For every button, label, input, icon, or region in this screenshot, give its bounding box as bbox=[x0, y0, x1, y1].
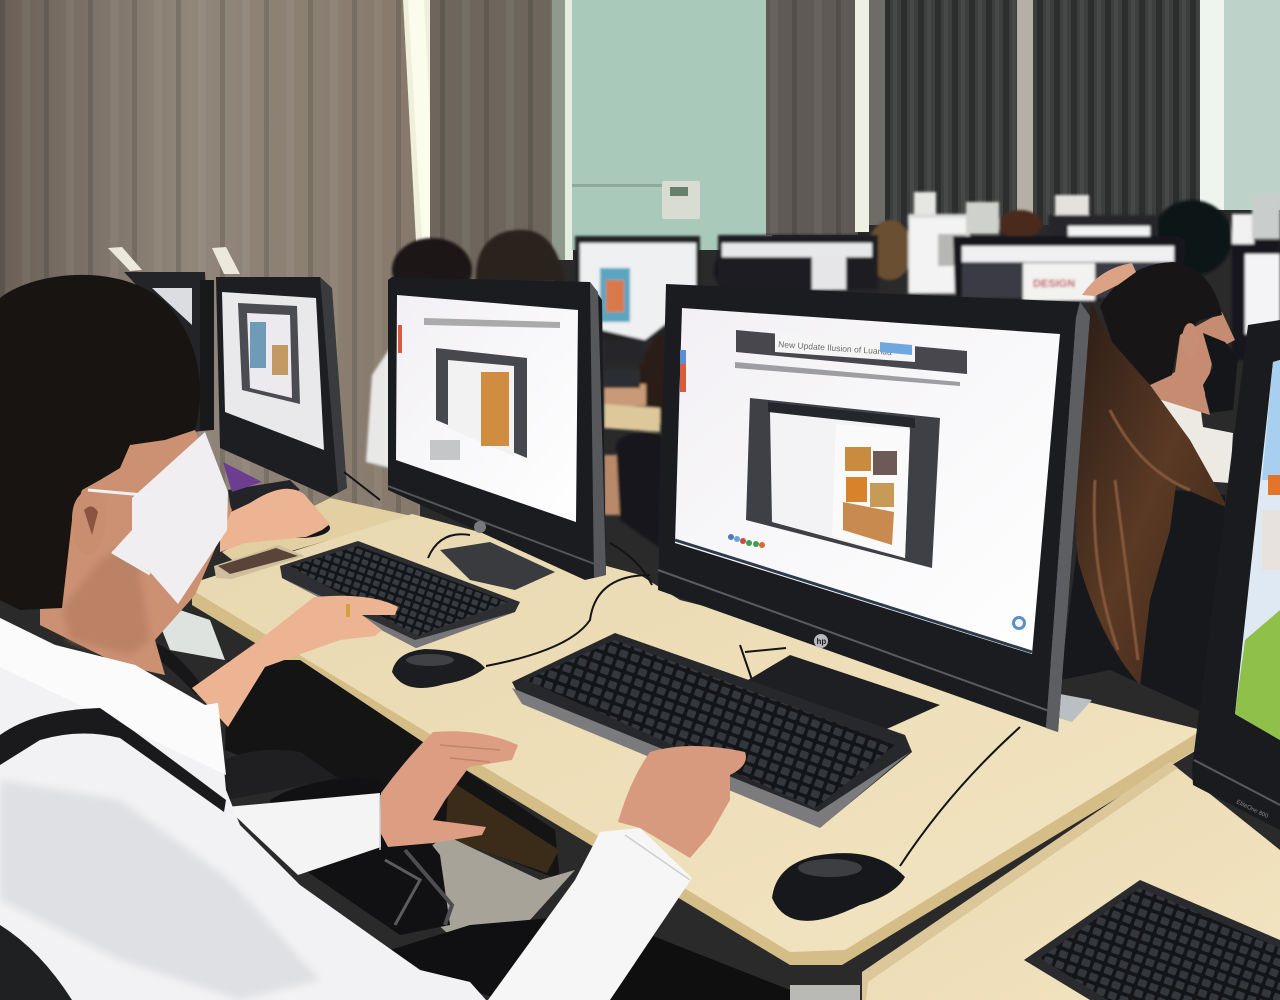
hand right bbox=[618, 746, 746, 858]
ponytail bbox=[1076, 303, 1228, 685]
main desk bbox=[192, 514, 1202, 965]
chair bbox=[1060, 488, 1226, 712]
monitor: second bbox=[388, 277, 606, 590]
neck shadow bbox=[62, 540, 150, 655]
banner headline: New Update Ilusion of Luanda bbox=[778, 339, 892, 357]
neck and face bbox=[40, 420, 232, 675]
shoulder strap bbox=[0, 708, 226, 812]
stand bbox=[440, 542, 555, 590]
mouse: front bbox=[772, 853, 905, 921]
monitor: right foreground bbox=[1192, 320, 1280, 830]
far student heads bbox=[366, 200, 1232, 515]
hair top bbox=[1100, 262, 1222, 385]
big monitor stand bbox=[748, 655, 940, 732]
monitor: far left bbox=[108, 247, 240, 432]
monitor: third row back bbox=[216, 277, 347, 497]
man with mask in front bbox=[0, 275, 746, 1000]
black mask bbox=[1203, 333, 1238, 413]
white jacket bbox=[1143, 398, 1233, 483]
phone on desk bbox=[214, 545, 305, 579]
back desk and floor behind the man bbox=[150, 498, 412, 660]
hair bbox=[0, 275, 200, 610]
model label: EliteOne 800 bbox=[1235, 799, 1270, 820]
mouse: second bbox=[392, 649, 485, 688]
hp logo bbox=[814, 634, 828, 648]
far screen word: DESIGN bbox=[1033, 278, 1075, 290]
keyboard: right foreground bbox=[1024, 880, 1280, 1000]
shirt folds bbox=[0, 780, 320, 1000]
big monitor bbox=[658, 284, 1090, 732]
sleeve and arm bbox=[226, 793, 381, 875]
distant row of monitors and students bbox=[366, 192, 1280, 548]
hand left bbox=[380, 731, 518, 847]
keyboard: second bbox=[280, 541, 520, 648]
under-desk dark area with chair and trousers bbox=[142, 640, 860, 1000]
big monitor right edge overlay bbox=[1046, 302, 1090, 732]
face mask bbox=[112, 432, 228, 604]
shirt body bbox=[0, 618, 486, 1000]
back arm and hand bbox=[192, 596, 398, 727]
chair back bbox=[0, 925, 72, 1000]
front right desk bbox=[862, 762, 1280, 1000]
keyboard: front bbox=[512, 633, 912, 828]
cables near the monitors bbox=[344, 472, 1020, 866]
neck and face bbox=[1150, 312, 1235, 415]
keyboard and hand: back row bbox=[220, 462, 330, 552]
cuff folds bbox=[380, 795, 690, 880]
hp logo: hp bbox=[816, 637, 826, 646]
right sleeve bbox=[488, 828, 692, 1000]
raised hand bbox=[1082, 263, 1136, 296]
collar bbox=[0, 618, 226, 775]
ear bbox=[72, 490, 107, 555]
right woman with ponytail bbox=[1060, 262, 1238, 712]
far chair bbox=[616, 432, 662, 548]
far desk bbox=[604, 404, 660, 432]
far monitor row bbox=[575, 192, 1280, 388]
screen bbox=[675, 308, 1060, 654]
